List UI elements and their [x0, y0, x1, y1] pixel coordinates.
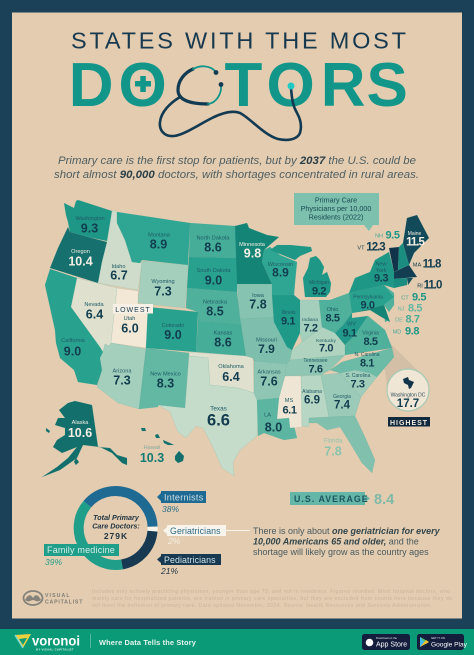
label: Wyoming: Wyoming: [151, 279, 175, 285]
logo: voronoi: [15, 632, 80, 652]
label: Vermont: VT: [357, 246, 365, 252]
label: North Carolina: [354, 352, 380, 370]
state: Georgia: [321, 373, 361, 417]
state: Colorado: [146, 307, 198, 352]
title: doctors: T: [224, 51, 262, 120]
button: Google Play: Google Play: [431, 642, 468, 648]
label: Alaska: Alaska: [72, 420, 89, 426]
label: Idaho: 6.7: [110, 268, 128, 282]
label: Mississippi: 6.1: [282, 404, 297, 416]
button: App Store: App Store: [376, 642, 407, 648]
label: family medicine: [44, 544, 119, 567]
US average: 8.4: [374, 492, 394, 508]
label: South Dakota: South Dakota: [197, 268, 231, 274]
state: North Carolina: [330, 348, 394, 377]
map: state shapes: [42, 200, 429, 477]
label: Kentucky: 7.0: [319, 342, 333, 354]
label: New York: New: [375, 262, 388, 268]
label: geriatricians: 2%: [167, 536, 181, 546]
state: Alaska: [42, 401, 127, 477]
label: Delaware: [395, 314, 420, 326]
label: Maryland: [393, 326, 419, 338]
label: Missouri: Missouri: [256, 338, 277, 344]
label: West Virginia: [342, 322, 357, 340]
divider: [89, 634, 92, 648]
label: Tennessee: [303, 358, 328, 376]
label: North Dakota: 8.6: [204, 240, 222, 254]
label: Iowa: 7.8: [249, 298, 267, 312]
state: Arkansas: [254, 361, 287, 400]
state: Rhode Island: [407, 278, 413, 285]
logo: Visual Capitalist: CAPITALIST: [45, 600, 83, 606]
state: Kansas: [196, 321, 246, 356]
label: pediatricians: 21%: [160, 566, 178, 576]
state: Oregon: [50, 227, 107, 283]
label: Washington: [75, 216, 105, 236]
label: West Virginia: WV: [347, 322, 356, 328]
label: Colorado: [162, 323, 184, 342]
donut center label: Total Primary: [93, 513, 140, 522]
label: New Hampshire: [375, 230, 400, 242]
label: Alaska: [68, 420, 92, 440]
state: North Dakota: [189, 223, 237, 258]
state: Oklahoma: [189, 352, 254, 393]
state: Wyoming: [138, 261, 188, 308]
label: Washington: Washington: [75, 216, 105, 222]
tagline: Where Data Tells the Story: [99, 638, 197, 647]
title: doctors: R: [321, 51, 365, 120]
state: Virginia: [345, 316, 392, 355]
label: Pennsylvania: Pennsylvania: [353, 294, 383, 300]
label: Rhode Island: 11.0: [424, 280, 442, 292]
label: Illinois: Illinois: [282, 310, 296, 316]
callout: Washington DC highest: Washington DC: [391, 392, 426, 398]
label: Vermont: [357, 242, 385, 254]
footnote: Includes only actively practicing physicians, younger than age 75, and not in residency. Figures rounded. Most hospital doctors, who: [92, 589, 450, 595]
label: New Jersey: NJ: [398, 306, 405, 312]
label: North Dakota: [197, 236, 230, 254]
donut center label: 279K: [104, 531, 128, 541]
label: Arkansas: Arkansas: [257, 370, 281, 376]
label: California: 9.0: [64, 344, 81, 358]
label: Alabama: [302, 389, 322, 406]
label: pediatricians: Pediatricians: [164, 555, 216, 565]
label: Virginia: Virginia: [362, 330, 379, 336]
state: Iowa: [237, 284, 282, 319]
label: Maine: Maine: [408, 231, 422, 237]
title: doctors: O: [118, 51, 167, 120]
label: Nevada: 6.4: [86, 308, 103, 322]
label: Florida: 7.8: [324, 444, 342, 458]
label: Iowa: Iowa: [252, 293, 265, 299]
label: Arizona: Arizona: [113, 368, 132, 374]
label: Tennessee: Tennessee: [303, 358, 328, 364]
label: Arkansas: [257, 370, 281, 388]
US average: [290, 492, 394, 508]
label: Kentucky: [316, 338, 336, 354]
footnote: mainly care for hospitalized patients, are trained in primary care specialties, but they are excluded from counts here because they do: [92, 596, 452, 602]
tag: lowest: LOWEST: [115, 307, 151, 314]
state: New Hampshire: [398, 243, 409, 270]
title: doctors: D: [69, 51, 113, 120]
title: doctors: S: [366, 51, 408, 120]
logo: voronoi: voronoi: [32, 632, 80, 648]
state: Nevada: [71, 278, 117, 352]
label: New Mexico: New Mexico: [150, 372, 181, 378]
label: California: California: [61, 338, 86, 344]
label: Massachusetts: MA: [413, 262, 421, 268]
label: Louisiana: [264, 412, 282, 434]
button: App Store: [362, 634, 410, 650]
label: Michigan: [309, 280, 329, 298]
label: Oregon: Oregon: [71, 249, 90, 255]
label: Colorado: 9.0: [164, 328, 182, 342]
label: Montana: 8.9: [150, 238, 167, 252]
title: doctors: [69, 51, 408, 120]
label: Arkansas: 7.6: [260, 374, 278, 388]
state: Texas: [158, 356, 258, 476]
label: Tennessee: 7.6: [308, 364, 323, 376]
map: DC callout wedge: [378, 326, 420, 385]
label: New York: York: [376, 268, 387, 274]
label: Alabama: 6.9: [304, 394, 320, 406]
text: geriatrician note: There is only about one geriatrician for every: [253, 526, 440, 536]
state: Maine: [403, 215, 429, 265]
state: New York: [349, 252, 394, 293]
map: state value labels: [61, 216, 442, 465]
label: Indiana: Indiana: [302, 317, 318, 323]
label: Kansas: Kansas: [214, 330, 233, 336]
label: Indiana: 7.2: [303, 322, 318, 334]
label: Montana: [148, 232, 171, 252]
label: Nebraska: 8.5: [206, 304, 224, 318]
US average: U.S. AVERAGE: [294, 494, 369, 504]
subtitle: short almost 90,000 doctors, with shortages concentrated in rural areas.: [54, 169, 419, 181]
state: Tennessee: [285, 355, 345, 376]
callout: Washington DC highest: [387, 369, 429, 411]
state: Mississippi: [277, 376, 302, 428]
label: Missouri: 7.9: [258, 342, 275, 356]
state: New Mexico: [139, 348, 189, 409]
label: Massachusetts: 11.8: [423, 258, 442, 270]
label: Hawaii: Hawaii: [144, 445, 160, 451]
state: West Virginia: [335, 313, 368, 345]
label: North Carolina: N. Carolina: [354, 352, 380, 358]
state: Hawaii: [141, 428, 184, 463]
label: New York: [374, 262, 388, 284]
icon: DC shape: [403, 377, 414, 389]
label: internists: Internists: [164, 492, 204, 502]
label: geriatricians: [163, 525, 226, 546]
tag: highest: HIGHEST: [390, 420, 428, 427]
button: Google Play: GET IT ON: [431, 636, 445, 640]
label: Nevada: [84, 302, 105, 322]
state: Indiana: [300, 300, 322, 342]
label: Utah: 6.0: [121, 322, 139, 336]
label: Illinois: 9.1: [281, 316, 295, 328]
donut chart: [79, 491, 153, 565]
state: Kentucky: [290, 327, 345, 360]
label: North Dakota: North Dakota: [197, 236, 230, 242]
label: New Hampshire: 9.5: [385, 230, 400, 242]
footer band: [0, 629, 474, 655]
donut center label: [92, 513, 140, 541]
button: Google Play: [417, 634, 468, 650]
label: Indiana: [302, 317, 318, 334]
label: Massachusetts: [413, 258, 442, 270]
state: Utah: [111, 288, 148, 348]
tag: lowest: [113, 304, 153, 314]
label: family medicine: Family medicine: [47, 545, 115, 555]
label: Ohio: [325, 307, 340, 324]
label: internists: 38%: [162, 504, 179, 514]
callout: map legend: Physicians per 10,000: [301, 204, 371, 213]
label: Maine: [406, 231, 425, 248]
label: Georgia: [333, 394, 351, 412]
state: Michigan lower: [303, 256, 331, 297]
state: Illinois: [272, 295, 300, 350]
label: Arizona: [113, 368, 132, 388]
logo: voronoi: BY VISUAL CAPITALIST: [36, 648, 74, 652]
label: New Hampshire: NH: [375, 234, 383, 240]
donut center label: Care Doctors:: [92, 522, 140, 530]
label: Texas: 6.6: [207, 412, 230, 430]
label: Oklahoma: 6.4: [222, 370, 240, 384]
label: Oregon: 10.4: [68, 254, 93, 268]
label: Alabama: Alabama: [302, 389, 322, 395]
callout: Washington DC highest: 17.7: [397, 398, 419, 410]
label: Kansas: [214, 330, 233, 350]
connector line: [226, 530, 250, 531]
label: Louisiana: LA: [264, 412, 271, 418]
label: Delaware: 8.7: [405, 314, 420, 326]
label: California: [61, 338, 86, 358]
state: South Dakota: [187, 257, 237, 292]
label: Mississippi: MS: [285, 398, 293, 404]
label: Louisiana: 8.0: [265, 420, 282, 434]
state: Minnesota: [235, 223, 279, 284]
label: Georgia: 7.4: [334, 400, 351, 412]
label: Wisconsin: 8.9: [272, 266, 289, 280]
footnote: not meet the definition of primary care. Data updated November, 2024. Source: Health Resources and Services Administration.: [92, 603, 432, 609]
state: Delaware: [384, 306, 389, 322]
label: West Virginia: 9.1: [342, 328, 357, 340]
state: Montana: [117, 212, 190, 265]
label: Georgia: Georgia: [333, 394, 351, 400]
label: New Jersey: 8.5: [408, 302, 422, 314]
label: Nebraska: [203, 300, 228, 318]
state: New Jersey: [384, 286, 394, 312]
label: New Jersey: [398, 302, 422, 314]
label: Virginia: 8.5: [363, 336, 378, 348]
label: Wisconsin: Wisconsin: [268, 262, 293, 268]
label: New Mexico: 8.3: [157, 376, 174, 390]
state: Idaho: [98, 211, 142, 290]
label: Michigan: Michigan: [309, 280, 329, 286]
label: Utah: Utah: [124, 316, 135, 322]
label: South Dakota: 9.0: [205, 274, 222, 288]
state: Nebraska: [186, 288, 241, 324]
label: Illinois: [281, 310, 296, 328]
label: family medicine: 39%: [45, 557, 62, 567]
label: Kentucky: Kentucky: [316, 338, 336, 344]
state: Massachusetts: [394, 265, 417, 279]
label: Maryland: 9.8: [405, 326, 419, 338]
state: California: [45, 269, 103, 385]
label: Pennsylvania: [353, 294, 383, 312]
label: Wisconsin: [268, 262, 293, 280]
title: states with the most: STATES WITH THE MOST: [71, 28, 406, 54]
text: geriatrician note: 10,000 Americans 65 and older, and the: [253, 536, 419, 546]
tag: highest: [388, 417, 430, 427]
state: South Carolina: [340, 370, 377, 397]
button: App Store: Download on the: [376, 636, 397, 640]
state: Connecticut: [394, 278, 407, 288]
label: Maine: 11.5: [406, 236, 425, 248]
logo: Visual Capitalist: [24, 591, 83, 606]
label: Arizona: 7.3: [113, 374, 131, 388]
label: Mississippi: [282, 398, 297, 416]
state: Louisiana: [257, 398, 297, 440]
title: doctors: O: [266, 51, 315, 120]
label: Nevada: Nevada: [84, 302, 105, 308]
label: Oklahoma: Oklahoma: [218, 364, 245, 370]
label: Missouri: [256, 338, 277, 356]
subtitle: Primary care is the first stop for patients, but by 2037 the U.S. could be: [58, 155, 416, 167]
state: Michigan: [270, 245, 312, 260]
label: New York: 9.3: [374, 272, 388, 284]
label: Florida: [324, 438, 343, 458]
label: Virginia: [362, 330, 379, 348]
state: Alabama: [301, 375, 329, 427]
state: Ohio: [319, 293, 352, 333]
callout: map legend: [294, 193, 379, 231]
label: Minnesota: 9.8: [244, 246, 261, 260]
label: internists: [157, 491, 206, 514]
state: Vermont: [389, 247, 399, 272]
label: South Carolina: S. Carolina: [346, 373, 371, 379]
label: geriatricians: Geriatricians: [170, 526, 221, 536]
label: Michigan: 9.2: [312, 286, 326, 298]
label: Wyoming: 7.3: [154, 284, 172, 298]
label: South Dakota: [197, 268, 231, 288]
label: Hawaii: 10.3: [140, 451, 164, 465]
state: Arizona: [97, 343, 146, 409]
callout: map legend: Primary Care: [315, 196, 357, 204]
state: Wisconsin: [262, 247, 297, 295]
label: Pennsylvania: 9.0: [360, 300, 375, 312]
label: Kansas: 8.6: [214, 336, 232, 350]
label: North Carolina: 8.1: [360, 358, 374, 370]
state: Maryland: [352, 305, 390, 322]
label: Connecticut: [401, 292, 426, 304]
label: Oklahoma: [218, 364, 245, 384]
label: Colorado: Colorado: [162, 323, 184, 329]
logo: Visual Capitalist: VISUAL: [45, 593, 71, 599]
label: South Carolina: [346, 373, 371, 390]
icon: stethoscope: [160, 66, 301, 140]
label: Delaware: DE: [395, 318, 403, 324]
label: Hawaii: [140, 445, 164, 465]
state: Pennsylvania: [349, 285, 394, 313]
label: Idaho: Idaho: [112, 264, 126, 270]
label: Connecticut: CT: [401, 296, 409, 302]
callout: map legend: Residents (2022): [309, 212, 363, 222]
label: Washington: 9.3: [81, 222, 98, 236]
label: Vermont: 12.3: [366, 242, 385, 254]
state: Missouri: [240, 317, 292, 364]
state: Florida: [309, 416, 375, 473]
text: geriatrician note: shortage will likely grow as the country ages: [253, 547, 429, 557]
label: Wyoming: [151, 279, 175, 298]
label: pediatricians: [157, 554, 221, 576]
label: Alaska: 10.6: [68, 426, 92, 440]
label: Rhode Island: RI: [417, 284, 423, 290]
label: Nebraska: Nebraska: [203, 300, 228, 306]
label: Maryland: MD: [393, 330, 401, 336]
label: Minnesota: [239, 242, 266, 260]
label: New Mexico: [150, 372, 181, 390]
label: Texas: Texas: [210, 406, 227, 412]
label: Florida: Florida: [324, 438, 343, 444]
label: South Carolina: 7.3: [350, 378, 365, 390]
label: Minnesota: Minnesota: [239, 242, 266, 248]
label: Ohio: Ohio: [327, 307, 338, 313]
label: Connecticut: 9.5: [412, 292, 426, 304]
state: Washington: [64, 200, 112, 241]
label: Ohio: 8.5: [325, 312, 340, 324]
label: Montana: Montana: [148, 232, 171, 238]
